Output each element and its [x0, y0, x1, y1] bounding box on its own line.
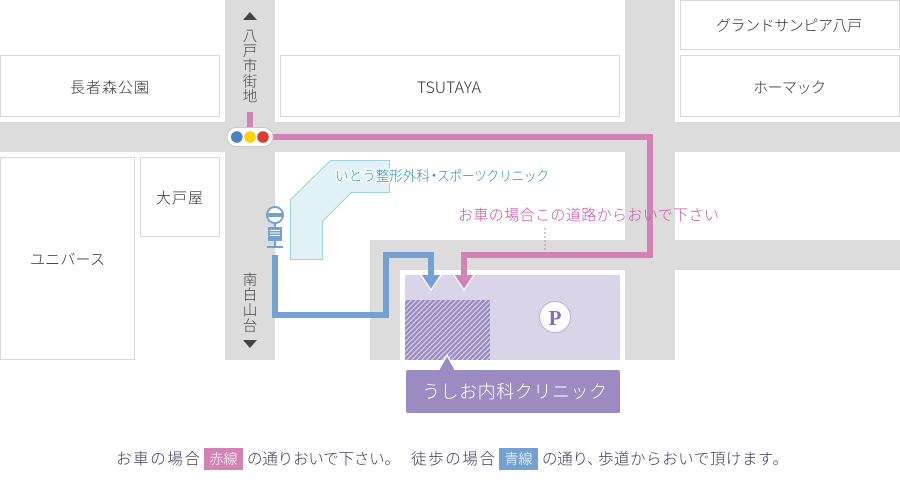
direction label: 南白山台: 台 [243, 315, 257, 336]
legend tag: blue line [499, 448, 538, 470]
direction label: 八戸市街地: 戸 [243, 40, 257, 61]
icon: bus stop [267, 207, 283, 248]
footer note: の通り [542, 447, 588, 469]
building: 大戸屋: 大戸屋 [156, 187, 203, 208]
direction label: 八戸市街地 [243, 12, 257, 106]
building: ユニバース [0, 158, 134, 360]
footer note [116, 447, 788, 470]
direction label: 南白山台 [243, 269, 257, 348]
car route: pink line [250, 112, 650, 280]
direction label: 八戸市街地: 市 [243, 55, 257, 76]
legend tag: red line: 赤線 [210, 449, 238, 469]
building: TSUTAYA [280, 56, 620, 116]
label: いとう整形外科・スポーツクリニック: スポーツクリニック [437, 166, 549, 186]
building: ユニバース: ユニバース [30, 248, 105, 270]
direction label: 八戸市街地: 街 [243, 70, 257, 92]
building: ホーマック: ホーマック [753, 76, 826, 98]
direction label: 南白山台: 白 [243, 284, 257, 305]
clinic name label: うしお内科クリニック [422, 378, 607, 404]
footer note: 歩道からおいで頂けます。 [598, 447, 788, 469]
legend tag: red line [204, 448, 243, 470]
building: グランドサンピア八戸 [680, 0, 900, 50]
legend tag: blue line: 青線 [504, 449, 532, 469]
parking icon: P [549, 306, 562, 330]
footer note: 、 [587, 447, 603, 469]
parking icon [540, 302, 570, 332]
footer note: お車の場合 [116, 447, 200, 469]
direction label: 八戸市街地: 地 [243, 86, 257, 106]
building: グランドサンピア八戸: グランドサンピア八戸 [716, 14, 862, 36]
label: いとう整形外科・スポーツクリニック [335, 166, 549, 186]
clinic plot [400, 270, 625, 360]
direction label: 南白山台: 南 [243, 269, 257, 290]
building: ホーマック [680, 56, 900, 116]
direction label: 南白山台: 山 [243, 300, 257, 320]
footer note: 徒歩の場合 [411, 447, 495, 469]
clinic name label [406, 355, 620, 413]
callout: car road note: お車の場合この道路からおいで下さい [458, 204, 719, 225]
building: 大戸屋 [140, 158, 220, 236]
clinic building hatch [405, 300, 490, 360]
arrowhead: car route [454, 275, 474, 290]
building: 長者森公園: 長者森公園 [70, 76, 149, 98]
arrowhead: walking route [421, 275, 441, 290]
building: 長者森公園 [0, 56, 220, 116]
direction label: 八戸市街地: 八 [243, 25, 257, 46]
landmark: いとう整形外科 building [290, 160, 390, 260]
walking route: blue line [275, 255, 431, 315]
building: TSUTAYA: TSUTAYA [417, 76, 481, 98]
label: いとう整形外科・スポーツクリニック: ・ [427, 166, 441, 186]
roads [0, 0, 900, 360]
footer note: の通りおいで下さい。 [247, 447, 400, 469]
traffic light [227, 128, 273, 146]
label: いとう整形外科・スポーツクリニック: いとう整形外科 [335, 166, 430, 186]
